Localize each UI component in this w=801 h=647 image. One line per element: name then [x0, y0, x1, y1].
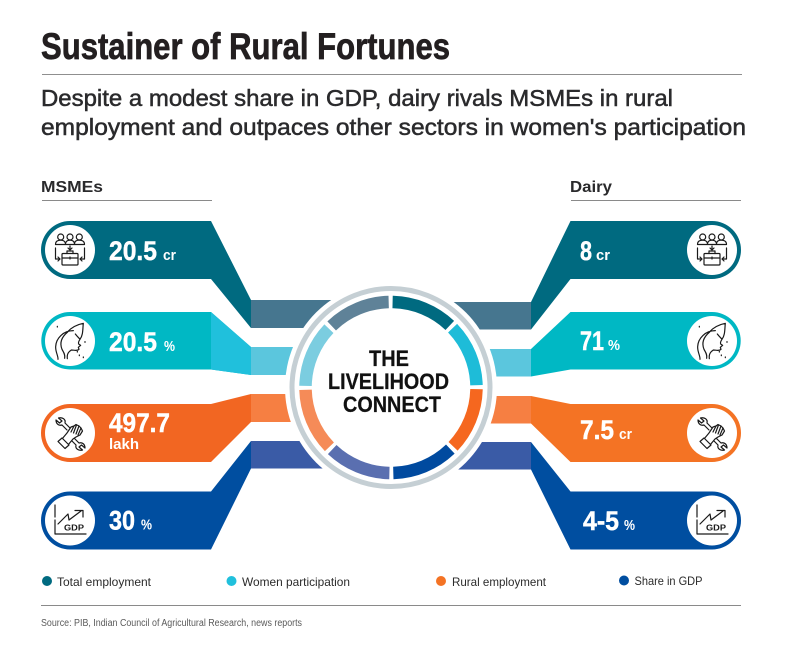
icon: woman's face [56, 323, 85, 359]
icon: GDP growth chart: GDP [706, 524, 727, 532]
value [109, 408, 170, 453]
icon: GDP growth chart: GDP [64, 524, 85, 532]
column heading: MSMEs: MSMEs [41, 179, 103, 196]
value [580, 236, 610, 266]
panel: MSMEs women participation [41, 312, 251, 375]
value: cr [596, 247, 610, 264]
icon: woman's face [698, 323, 727, 359]
value: 8 [580, 236, 592, 266]
panel: MSMEs total employment [41, 221, 251, 328]
icon: hand with wrench [56, 418, 85, 450]
central label: LIVELIHOOD [328, 369, 449, 394]
value [109, 506, 152, 536]
panel: Dairy share in GDP [531, 442, 741, 550]
icon: people and briefcase [698, 234, 726, 265]
legend: Total employment [57, 575, 152, 589]
subtitle: employment and outpaces other sectors in women's participation [41, 114, 746, 140]
column heading: Dairy: Dairy [570, 179, 612, 196]
subtitle: Despite a modest share in GDP, dairy rivals MSMEs in rural [41, 85, 673, 111]
value: 7.5 [580, 415, 614, 445]
value: % [624, 517, 635, 534]
central ring: The Livelihood Connect [270, 267, 512, 508]
source note: Source: PIB, Indian Council of Agricultural Research, news reports [41, 618, 302, 629]
value: 20.5 [109, 236, 157, 266]
value: lakh [109, 436, 139, 453]
panel: Dairy women participation [531, 312, 741, 376]
connector bands [251, 300, 531, 470]
icon: people and briefcase [56, 234, 84, 265]
title: Sustainer of Rural Fortunes [41, 26, 450, 67]
value: % [141, 516, 152, 534]
central label: THE [369, 346, 409, 371]
value: % [164, 338, 175, 355]
value: 497.7 [109, 408, 170, 438]
icon: GDP growth chart [697, 505, 728, 534]
panel: Dairy total employment [531, 221, 741, 330]
panel: Dairy rural employment [531, 396, 741, 462]
value: 30 [109, 506, 135, 536]
value: cr [163, 247, 176, 264]
central label [328, 346, 449, 417]
value: 20.5 [109, 327, 157, 357]
central label: CONNECT [343, 392, 442, 417]
legend [42, 574, 702, 589]
icon: GDP growth chart [55, 505, 86, 534]
value: 4-5 [583, 506, 619, 536]
value: cr [619, 426, 632, 443]
subtitle [41, 85, 746, 140]
value: % [608, 337, 620, 354]
value: 71 [580, 326, 604, 356]
icon: hand with wrench [698, 418, 727, 450]
legend: Share in GDP [634, 574, 702, 588]
panel: MSMEs share in GDP [41, 441, 251, 550]
legend: Women participation [242, 575, 350, 589]
legend: Rural employment [452, 575, 547, 589]
panel: MSMEs rural employment [41, 394, 251, 462]
